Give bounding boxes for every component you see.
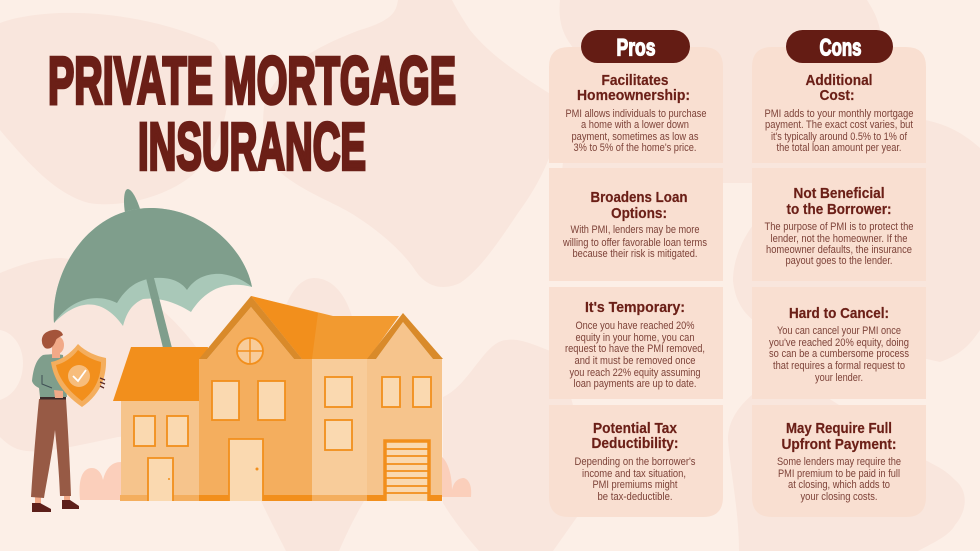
card: facilitates homeownership: Homeownership:: [577, 87, 690, 104]
panel: pros: [549, 47, 723, 517]
card: not beneficial to the borrower: homeowner defaults, the insurance: [766, 244, 912, 256]
card: facilitates homeownership: a home with a lower down: [581, 119, 689, 131]
card: it's temporary: [549, 287, 723, 399]
card: not beneficial to the borrower: payout goes to the lender.: [786, 255, 892, 267]
card: additional cost: [752, 47, 926, 163]
illustration: person with shield: [31, 330, 106, 512]
card: it's temporary: Once you have reached 20%: [576, 320, 695, 332]
card: not beneficial to the borrower: [752, 168, 926, 281]
card: broadens loan options: Options:: [611, 205, 667, 222]
card: broadens loan options: Broadens Loan: [590, 189, 688, 206]
title: INSURANCE: [138, 109, 366, 184]
card: may require full upfront payment: your closing costs.: [800, 491, 878, 503]
card: it's temporary: loan payments are up to date.: [574, 378, 696, 390]
illustration: umbrella: [54, 189, 252, 348]
card: it's temporary: request to have the PMI removed,: [565, 343, 705, 355]
card: broadens loan options: willing to offer favorable loan terms: [562, 237, 707, 249]
card: facilitates homeownership: Facilitates: [602, 72, 668, 89]
card: hard to cancel: You can cancel your PMI once: [777, 325, 901, 337]
card: facilitates homeownership: PMI allows individuals to purchase: [566, 108, 707, 120]
card: may require full upfront payment: at closing, which adds to: [788, 479, 890, 491]
card: potential tax deductibility: Potential Tax: [593, 420, 678, 437]
title: PRIVATE MORTGAGE: [48, 43, 456, 118]
heading pill: pros: Pros: [616, 34, 656, 62]
title: [48, 43, 456, 184]
illustration: bushes: [80, 457, 471, 500]
card: it's temporary: you reach 22% equity assuming: [570, 367, 701, 379]
card: potential tax deductibility: [549, 405, 723, 517]
card: facilitates homeownership: [549, 47, 723, 163]
card: hard to cancel: so can be a cumbersome process: [769, 348, 909, 360]
card: hard to cancel: [752, 287, 926, 399]
card: hard to cancel: that requires a formal request to: [773, 360, 905, 372]
card: not beneficial to the borrower: The purpose of PMI is to protect the: [764, 221, 914, 233]
card: additional cost: PMI adds to your monthly mortgage: [764, 108, 914, 120]
card: may require full upfront payment: May Require Full: [786, 420, 892, 437]
heading pill: cons: [786, 30, 893, 63]
card: not beneficial to the borrower: Not Beneficial: [794, 185, 884, 202]
card: it's temporary: It's Temporary:: [585, 299, 685, 316]
illustration: house: [113, 296, 443, 501]
heading pill: cons: Cons: [820, 34, 862, 62]
card: broadens loan options: because their risk is mitigated.: [572, 248, 698, 260]
card: additional cost: Additional: [806, 72, 872, 89]
card: broadens loan options: [549, 168, 723, 281]
card: may require full upfront payment: Some lenders may require the: [777, 456, 901, 468]
card: may require full upfront payment: [752, 405, 926, 517]
card: it's temporary: equity in your home, you can: [576, 332, 695, 344]
card: potential tax deductibility: PMI premiums might: [592, 479, 678, 491]
card: facilitates homeownership: 3% to 5% of the home's price.: [574, 142, 696, 154]
card: broadens loan options: With PMI, lenders may be more: [570, 224, 700, 236]
card: not beneficial to the borrower: lender, not the homeowner. If the: [770, 233, 908, 245]
card: may require full upfront payment: PMI premium to be paid in full: [778, 468, 900, 480]
card: additional cost: payment. The exact cost varies, but: [765, 119, 913, 131]
card: hard to cancel: you've reached 20% equity, doing: [769, 337, 909, 349]
card: may require full upfront payment: Upfront Payment:: [782, 436, 896, 453]
card: not beneficial to the borrower: to the Borrower:: [786, 201, 892, 218]
heading pill: pros: [581, 30, 690, 63]
card: hard to cancel: your lender.: [815, 372, 863, 384]
panel: cons: [752, 47, 926, 517]
card: additional cost: Cost:: [820, 87, 854, 104]
card: additional cost: it's typically around 0.5% to 1% of: [771, 131, 907, 143]
card: it's temporary: and it must be removed once: [574, 355, 696, 367]
card: facilitates homeownership: payment, sometimes as low as: [572, 131, 698, 143]
card: potential tax deductibility: be tax-deductible.: [598, 491, 672, 503]
icon: shield: [51, 344, 106, 407]
card: potential tax deductibility: Deductibility:: [592, 435, 678, 452]
card: potential tax deductibility: Depending on the borrower's: [574, 456, 696, 468]
card: additional cost: the total loan amount per year.: [776, 142, 902, 154]
card: potential tax deductibility: income and tax situation,: [582, 468, 686, 480]
card: hard to cancel: Hard to Cancel:: [789, 305, 889, 322]
